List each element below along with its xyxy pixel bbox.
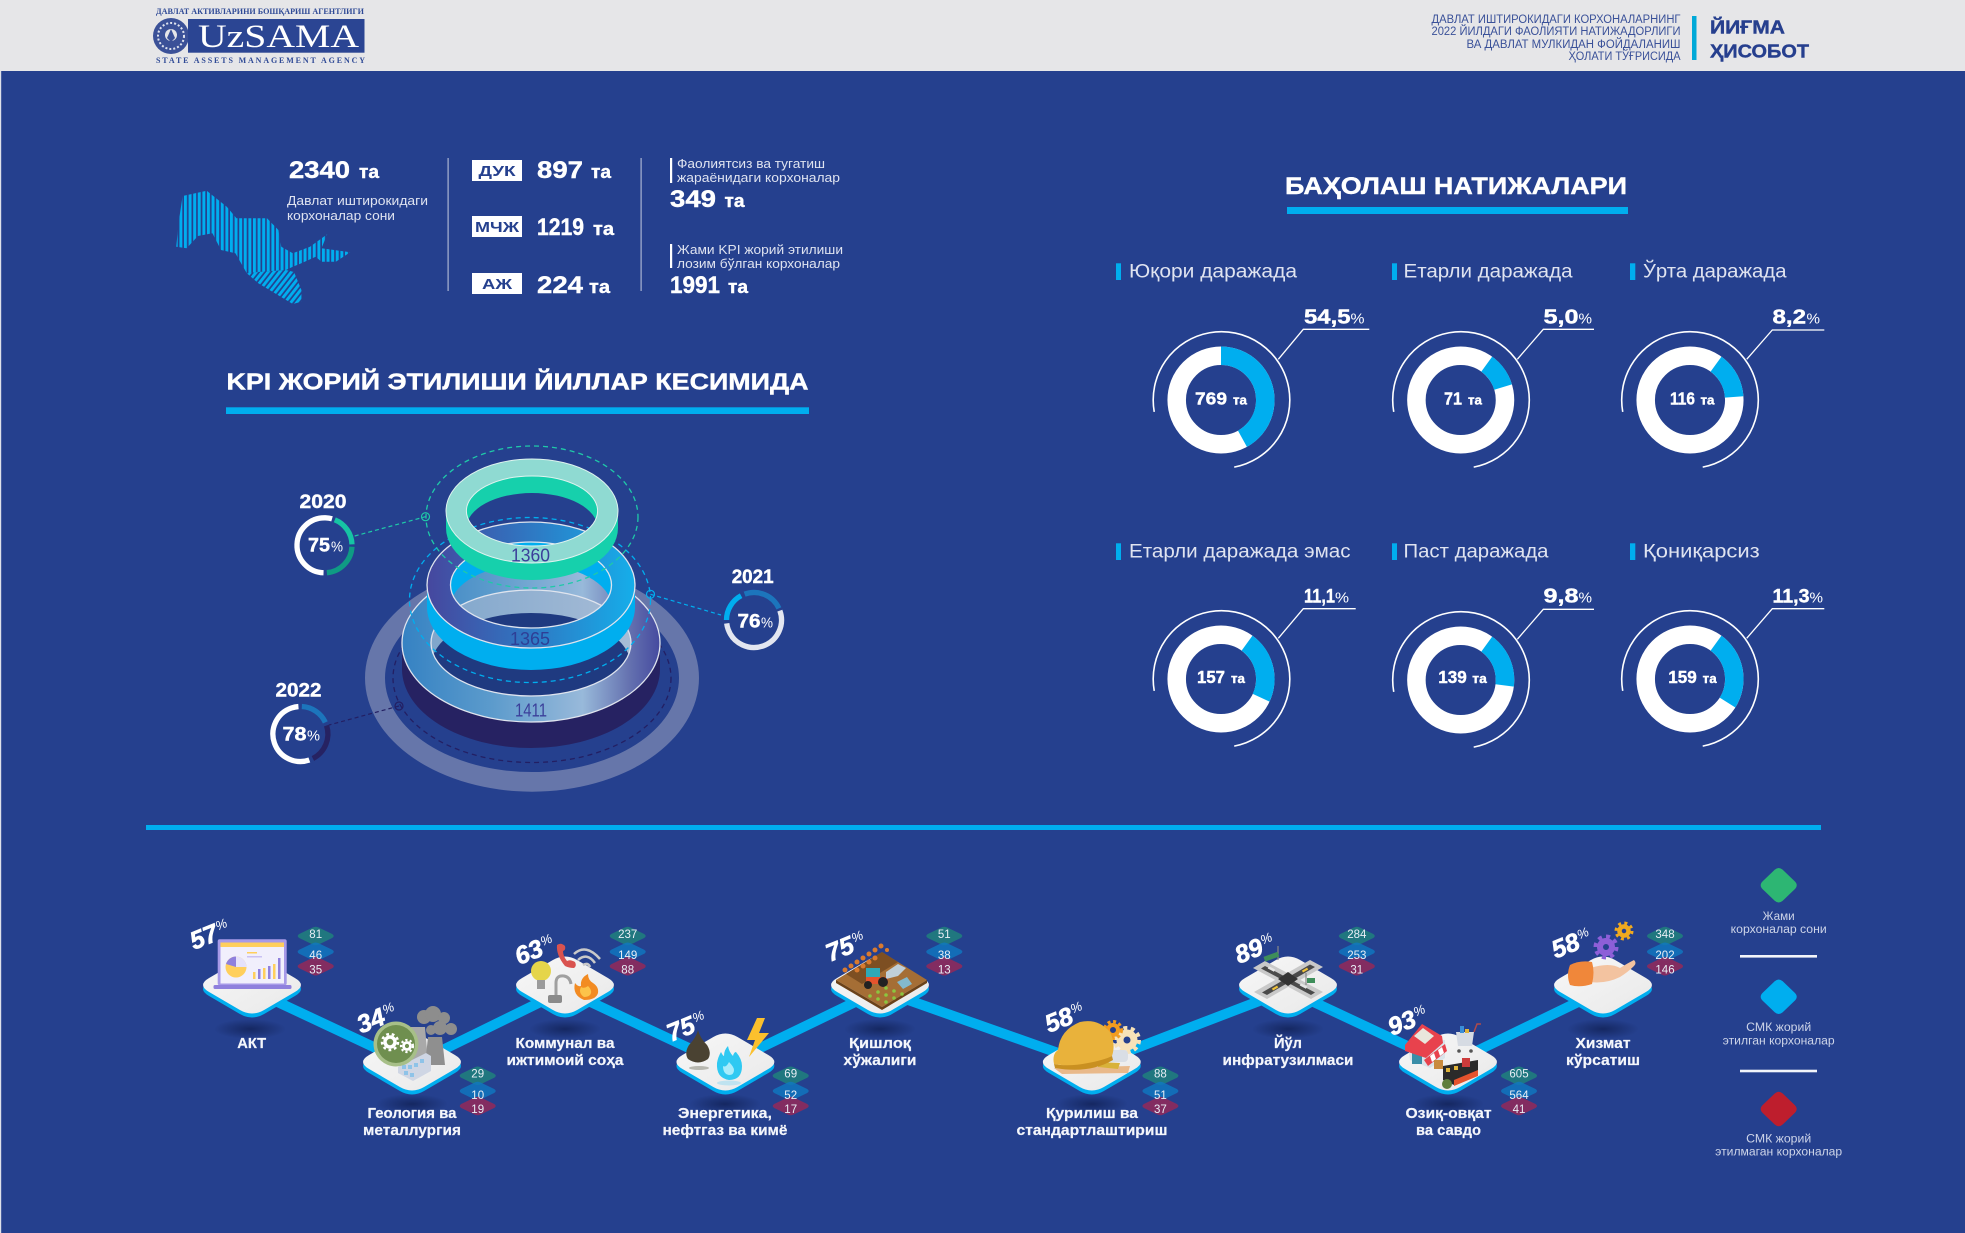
icon: road crossing bbox=[1253, 946, 1323, 999]
donut: insufficient level: 11,1 bbox=[1304, 587, 1335, 608]
sector: geology bbox=[353, 998, 461, 1139]
donut: high level: 769 bbox=[1195, 388, 1227, 408]
stat: KPI required enterprises: та bbox=[728, 277, 749, 297]
icon: helmet and gears bbox=[1054, 1021, 1139, 1074]
halo under rings bbox=[365, 564, 699, 792]
counts: services: 202 bbox=[1655, 950, 1675, 962]
counts: energy: 52 bbox=[784, 1090, 797, 1102]
counts: services bbox=[1647, 927, 1683, 976]
donut: insufficient level: Етарли даражада эмас bbox=[1129, 542, 1350, 563]
logo: UzSAMA: STATE ASSETS MANAGEMENT AGENCY bbox=[156, 56, 365, 65]
donut: unsatisfactory: Қониқарсиз bbox=[1643, 542, 1760, 563]
report subtitle bbox=[1432, 14, 1681, 63]
donut: high level: % bbox=[1350, 310, 1364, 327]
legend item: total: корхоналар сони bbox=[1731, 924, 1827, 936]
percent bbox=[663, 1006, 711, 1048]
name bbox=[1406, 1105, 1492, 1139]
stat: legal forms bbox=[472, 157, 615, 299]
percent bbox=[1384, 1000, 1432, 1042]
donut: low level: Паст даражада bbox=[1404, 542, 1549, 563]
name bbox=[506, 1035, 624, 1069]
counts: geology: 19 bbox=[471, 1104, 484, 1116]
percent: 89 bbox=[1231, 933, 1267, 970]
ring: 2021 bbox=[427, 522, 635, 670]
stat: legal forms: МЧЖ bbox=[475, 219, 520, 236]
report subtitle: ВА ДАВЛАТ МУЛКИДАН ФОЙДАЛАНИШ bbox=[1466, 38, 1680, 51]
counts: food and trade: 564 bbox=[1509, 1090, 1529, 1102]
ring: 2022 bbox=[402, 564, 660, 748]
report title: ҲИСОБОТ bbox=[1710, 40, 1810, 62]
name bbox=[1222, 1034, 1354, 1069]
stat: legal forms: АЖ bbox=[482, 276, 513, 293]
counts: АКТ: 81 bbox=[309, 929, 322, 941]
sector: agriculture bbox=[822, 926, 929, 1069]
percent bbox=[186, 914, 234, 956]
gauge: 2020 75%: % bbox=[331, 539, 343, 556]
donut: low level: % bbox=[1578, 590, 1592, 607]
counts: roads: 253 bbox=[1347, 950, 1366, 962]
heading: KPI by years: KPI ЖОРИЙ ЭТИЛИШИ ЙИЛЛАР КЕСИМИДА bbox=[226, 368, 808, 394]
name bbox=[662, 1105, 788, 1139]
gauge: 2022 78%: 78 bbox=[282, 725, 306, 746]
gauge: 2022 78%: 2022 bbox=[276, 681, 322, 702]
logo: UzSAMA: ДАВЛАТ АКТИВЛАРИНИ БОШҚАРИШ АГЕНТЛИГИ bbox=[156, 7, 365, 16]
connector: 2021 bbox=[646, 590, 721, 615]
name: Қурилиш ва bbox=[1046, 1105, 1139, 1122]
counts: geology: 29 bbox=[471, 1068, 484, 1080]
percent bbox=[1041, 997, 1089, 1039]
percent bbox=[353, 998, 401, 1039]
stat: legal forms: ДУК bbox=[478, 163, 517, 180]
donut: medium level: % bbox=[1806, 310, 1820, 327]
name bbox=[1566, 1035, 1640, 1069]
counts: energy: 69 bbox=[784, 1068, 797, 1080]
legend item: SMK implemented bbox=[1723, 979, 1835, 1047]
donut: insufficient level: % bbox=[1335, 590, 1349, 607]
report title: ЙИҒМА bbox=[1710, 16, 1785, 38]
stat: inactive enterprises: та bbox=[724, 191, 746, 211]
percent: % bbox=[1258, 929, 1274, 948]
donut: insufficient level bbox=[1116, 542, 1356, 758]
gauge: 2021 76%: % bbox=[761, 615, 773, 632]
gauge: 2021 76%: 2021 bbox=[732, 567, 774, 588]
name bbox=[844, 1035, 916, 1069]
name: хўжалиги bbox=[844, 1052, 916, 1069]
timeline path bbox=[252, 990, 1603, 1065]
counts: geology: 10 bbox=[471, 1090, 484, 1102]
donut: medium level bbox=[1611, 261, 1824, 479]
percent: % bbox=[380, 999, 396, 1017]
legend item: total bbox=[1731, 868, 1827, 936]
gauge: 2021 76% bbox=[719, 567, 789, 655]
connector: 2022 bbox=[329, 702, 403, 725]
donut: sufficient level: Етарли даражада bbox=[1404, 262, 1573, 283]
name bbox=[1016, 1105, 1168, 1139]
donut: sufficient level bbox=[1382, 262, 1594, 479]
name: Геология ва bbox=[368, 1105, 457, 1122]
percent bbox=[822, 926, 870, 968]
heading: assessment results: БАҲОЛАШ НАТИЖАЛАРИ bbox=[1285, 173, 1627, 200]
donut: sufficient level: 71 bbox=[1444, 388, 1462, 408]
stat: legal forms: 224 bbox=[537, 272, 584, 299]
sector: food and trade bbox=[1384, 1000, 1497, 1139]
stat: legal forms: та bbox=[593, 219, 615, 239]
header bar bbox=[0, 0, 1965, 71]
legend item: SMK implemented: этилган корхоналар bbox=[1723, 1035, 1835, 1047]
percent bbox=[511, 930, 559, 971]
percent bbox=[1547, 923, 1595, 964]
donut: unsatisfactory: % bbox=[1810, 590, 1823, 607]
stat: KPI required enterprises: лозим бўлган корхоналар bbox=[677, 257, 840, 271]
legend item: SMK implemented: СМК жорий bbox=[1746, 1022, 1811, 1034]
donut: medium level: та bbox=[1700, 392, 1715, 408]
name: ижтимоий соҳа bbox=[506, 1052, 624, 1069]
name: кўрсатиш bbox=[1566, 1052, 1640, 1069]
stat: KPI required enterprises: Жами KPI жорий этилиши bbox=[677, 243, 843, 257]
ring: 2020: 1360 bbox=[511, 546, 550, 566]
icon: hand with gears bbox=[1568, 923, 1636, 986]
icon: oil, gas, lightning bbox=[686, 1018, 769, 1086]
counts: food and trade: 41 bbox=[1513, 1104, 1525, 1116]
counts: agriculture: 51 bbox=[938, 929, 951, 941]
report title bbox=[1710, 16, 1810, 62]
name: Энергетика, bbox=[678, 1105, 772, 1122]
counts: services: 146 bbox=[1655, 964, 1675, 976]
report subtitle: 2022 ЙИЛДАГИ ФАОЛИЯТИ НАТИЖАДОРЛИГИ bbox=[1432, 25, 1680, 38]
percent: % bbox=[1575, 924, 1591, 942]
sector: services bbox=[1547, 923, 1652, 1069]
counts: agriculture bbox=[926, 927, 962, 976]
icon: laptop bbox=[214, 939, 292, 989]
ring: 2020 bbox=[446, 459, 618, 580]
percent: % bbox=[538, 931, 554, 949]
name: Йўл bbox=[1274, 1034, 1302, 1052]
percent: % bbox=[1411, 1001, 1427, 1020]
counts: construction: 88 bbox=[1154, 1068, 1167, 1080]
report subtitle: ДАВЛАТ ИШТИРОКИДАГИ КОРХОНАЛАРНИНГ bbox=[1432, 14, 1681, 26]
donut: low level: 139 bbox=[1438, 667, 1467, 687]
donut: low level: 9,8 bbox=[1544, 586, 1578, 608]
donut: low level: та bbox=[1472, 671, 1488, 686]
stat: legal forms: 1219 bbox=[537, 214, 584, 241]
percent: % bbox=[213, 915, 229, 934]
donut: unsatisfactory: 159 bbox=[1668, 667, 1697, 687]
donut: unsatisfactory: та bbox=[1703, 671, 1717, 686]
donut: insufficient level: та bbox=[1231, 671, 1246, 686]
counts: agriculture: 13 bbox=[938, 964, 951, 976]
donut: medium level: 116 bbox=[1670, 388, 1695, 408]
stat: total enterprises: 2340 bbox=[289, 157, 350, 184]
logo: UzSAMA bbox=[153, 7, 365, 65]
name bbox=[363, 1105, 461, 1139]
stat: inactive enterprises: Фаолиятсиз ва тугатиш bbox=[677, 157, 825, 171]
name: нефтгаз ва кимё bbox=[662, 1122, 788, 1139]
donut: insufficient level: 157 bbox=[1197, 667, 1225, 687]
donut: low level bbox=[1382, 542, 1594, 759]
report subtitle: ҲОЛАТИ ТЎҒРИСИДА bbox=[1568, 50, 1681, 63]
counts: roads: 31 bbox=[1350, 964, 1363, 976]
counts: utilities bbox=[610, 927, 646, 976]
stat: legal forms: 897 bbox=[537, 157, 583, 184]
counts: utilities: 237 bbox=[618, 929, 637, 941]
name: Коммунал ва bbox=[516, 1035, 615, 1052]
donut: high level bbox=[1116, 262, 1369, 479]
counts: energy: 17 bbox=[784, 1104, 797, 1116]
heading: assessment results bbox=[1285, 173, 1628, 214]
stat: total enterprises bbox=[287, 157, 428, 223]
gauge: 2022 78%: % bbox=[307, 728, 320, 745]
icon: Uzbekistan striped map bbox=[176, 191, 350, 304]
gauge: 2020 75% bbox=[289, 492, 360, 581]
percent: % bbox=[849, 927, 865, 946]
gauge: 2020 75%: 75 bbox=[308, 536, 330, 557]
heading: KPI by years bbox=[226, 368, 809, 414]
chart: stacked KPI rings bbox=[365, 446, 699, 792]
counts: food and trade bbox=[1501, 1066, 1537, 1116]
legend bbox=[1715, 868, 1842, 1159]
stat: KPI required enterprises: 1991 bbox=[670, 272, 720, 299]
percent: % bbox=[1068, 998, 1084, 1017]
stat: KPI required enterprises bbox=[670, 243, 843, 299]
donut: high level: та bbox=[1233, 392, 1248, 408]
counts: agriculture: 38 bbox=[938, 950, 951, 962]
sector: construction bbox=[1016, 997, 1168, 1139]
counts: utilities: 88 bbox=[621, 964, 634, 976]
gauge: 2022 78% bbox=[265, 681, 335, 769]
legend item: SMK not implemented bbox=[1715, 1092, 1842, 1159]
gauge: 2020 75%: 2020 bbox=[300, 492, 346, 513]
counts: services: 348 bbox=[1655, 929, 1675, 941]
sector: energy bbox=[662, 1006, 788, 1139]
percent: 34 bbox=[353, 1003, 389, 1039]
ring: 2021: 1365 bbox=[510, 629, 550, 649]
counts: АКТ: 46 bbox=[309, 950, 322, 962]
donut: unsatisfactory: 11,3 bbox=[1772, 586, 1810, 608]
sector: АКТ bbox=[186, 914, 301, 1052]
connector: 2020 bbox=[355, 513, 430, 536]
counts: utilities: 149 bbox=[618, 950, 637, 962]
counts: food and trade: 605 bbox=[1509, 1068, 1529, 1080]
percent: 58 bbox=[1547, 928, 1584, 964]
icon: shop, cart, stall bbox=[1405, 1024, 1481, 1089]
counts: geology bbox=[460, 1066, 496, 1116]
donut: high level: Юқори даражада bbox=[1129, 262, 1297, 283]
name: Озиқ-овқат bbox=[1406, 1105, 1492, 1122]
name: ва савдо bbox=[1416, 1122, 1481, 1139]
stat: inactive enterprises: 349 bbox=[670, 186, 716, 213]
donut: unsatisfactory bbox=[1611, 542, 1824, 758]
percent: % bbox=[690, 1007, 706, 1026]
stat: inactive enterprises bbox=[670, 157, 840, 213]
legend item: SMK not implemented: этилмаган корхоналар bbox=[1715, 1147, 1842, 1159]
icon: farm field with tractor bbox=[836, 944, 927, 1010]
percent bbox=[1231, 928, 1279, 970]
counts: energy bbox=[773, 1066, 809, 1116]
percent: 75 bbox=[822, 931, 859, 968]
icon: utilities bbox=[531, 944, 600, 1003]
percent: 57 bbox=[186, 919, 223, 956]
gauge: 2021 76%: 76 bbox=[738, 612, 760, 633]
stat: total enterprises: Давлат иштирокидаги bbox=[287, 193, 428, 208]
stat: total enterprises: корхоналар сони bbox=[287, 208, 395, 223]
counts: roads: 284 bbox=[1347, 929, 1367, 941]
donut: sufficient level: % bbox=[1578, 310, 1592, 327]
name: металлургия bbox=[363, 1122, 461, 1139]
counts: construction bbox=[1142, 1066, 1178, 1116]
percent: 75 bbox=[663, 1011, 700, 1048]
name: Қишлоқ bbox=[849, 1035, 912, 1052]
name: Хизмат bbox=[1576, 1035, 1630, 1052]
percent: 63 bbox=[511, 934, 547, 971]
legend item: SMK not implemented: СМК жорий bbox=[1746, 1133, 1811, 1145]
counts: roads bbox=[1339, 927, 1375, 976]
legend item: total: Жами bbox=[1763, 911, 1795, 923]
icon: factory and gears bbox=[374, 1006, 457, 1081]
stat: total enterprises: та bbox=[359, 162, 380, 182]
sector: АКТ: АКТ bbox=[237, 1035, 266, 1052]
ring: 2022: 1411 bbox=[515, 700, 547, 720]
sector: utilities bbox=[506, 930, 624, 1069]
percent: 58 bbox=[1041, 1002, 1077, 1039]
donut: sufficient level: та bbox=[1468, 392, 1483, 408]
donut: medium level: Ўрта даражада bbox=[1643, 261, 1787, 283]
stat: inactive enterprises: жараёнидаги корхоналар bbox=[677, 171, 840, 185]
counts: АКТ: 35 bbox=[309, 964, 322, 976]
donut: medium level: 8,2 bbox=[1772, 306, 1806, 328]
donut: high level: 54,5 bbox=[1304, 306, 1350, 328]
counts: construction: 37 bbox=[1154, 1104, 1167, 1116]
stat: legal forms: та bbox=[591, 162, 612, 182]
donut: sufficient level: 5,0 bbox=[1544, 306, 1578, 328]
percent: 93 bbox=[1384, 1005, 1420, 1042]
counts: construction: 51 bbox=[1154, 1090, 1167, 1102]
name: инфратузилмаси bbox=[1222, 1052, 1354, 1069]
counts: АКТ bbox=[298, 927, 334, 976]
logo: UzSAMA: UzSAMA bbox=[198, 19, 359, 55]
stat: legal forms: та bbox=[589, 277, 611, 297]
sector: roads bbox=[1222, 928, 1354, 1069]
name: стандартлаштириш bbox=[1016, 1122, 1168, 1139]
